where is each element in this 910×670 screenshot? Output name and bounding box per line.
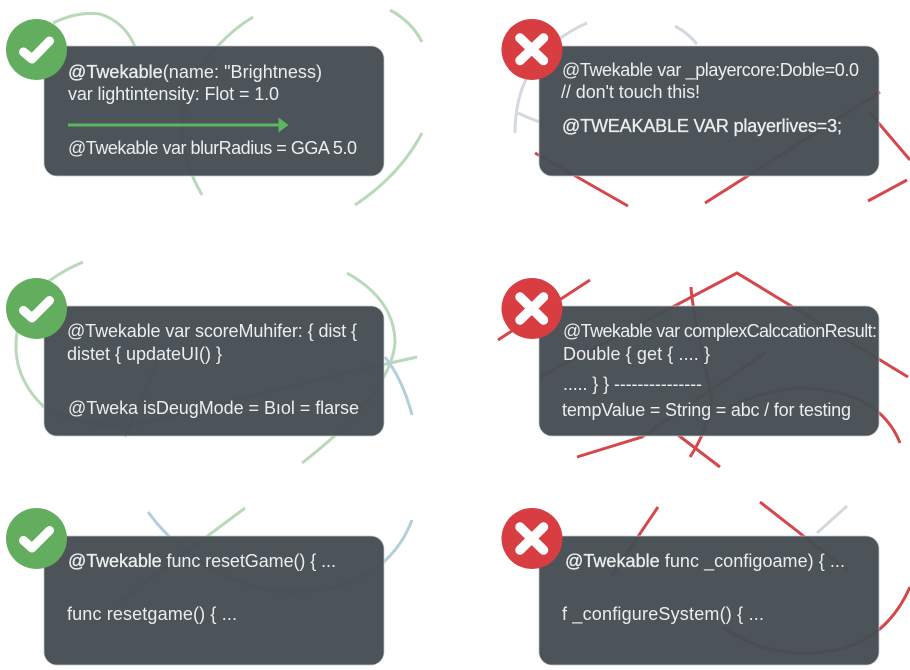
code text bbox=[561, 60, 859, 136]
code text: @Tweka isDeugMode = Bıol = flarse bbox=[68, 398, 359, 418]
panel: good example, score multiplier bbox=[6, 262, 417, 463]
panel: bad example, configure system bbox=[502, 502, 910, 665]
code text bbox=[67, 551, 336, 624]
code text: var lightintensity: Flot = 1.0 bbox=[68, 84, 279, 104]
code text bbox=[562, 321, 877, 420]
code text: @Twekable func _configoame) { ... bbox=[565, 551, 845, 572]
code card bbox=[44, 46, 384, 176]
code text: @Twekable var blurRadius = GGA 5.0 bbox=[68, 138, 357, 158]
icon: check badge bbox=[6, 19, 67, 80]
panel: good example, named tweakable bbox=[6, 10, 422, 205]
icon: cross badge bbox=[502, 19, 562, 80]
code text: // don't touch this! bbox=[561, 82, 700, 102]
panel: bad example, private score bbox=[502, 19, 910, 206]
code text: @TWEAKABLE VAR playerlives=3; bbox=[562, 116, 842, 136]
code text: f _configureSystem() { ... bbox=[562, 604, 764, 625]
code text: @Twekable var scoreMuhifer: { dist { bbox=[67, 321, 357, 341]
code card bbox=[44, 306, 384, 436]
panel: bad example, complex calculation bbox=[498, 273, 908, 467]
code card bbox=[539, 46, 879, 176]
icon: check badge bbox=[6, 278, 67, 339]
code text bbox=[68, 62, 357, 158]
code text: tempValue = String = abc / for testing bbox=[562, 400, 851, 420]
code text: Double { get { .... } bbox=[563, 344, 710, 364]
icon: cross badge bbox=[502, 508, 562, 569]
code text bbox=[562, 551, 845, 625]
code card bbox=[539, 306, 879, 436]
arrow: green bbox=[68, 120, 286, 130]
code text: ..... } } --------------- bbox=[563, 374, 702, 394]
code card bbox=[539, 536, 879, 665]
code text: @Twekable var complexCalccationResult: bbox=[563, 321, 877, 341]
code text: @Twekable(name: "Brightness) bbox=[68, 62, 322, 82]
code text: @Twekable func resetGame() { ... bbox=[68, 551, 336, 571]
code text bbox=[67, 321, 359, 418]
icon: check badge bbox=[6, 508, 67, 569]
code text: @Twekable var _playercore:Doble=0.0 bbox=[562, 60, 859, 81]
code text: distet { updateUI() } bbox=[67, 344, 222, 364]
code text: func resetgame() { ... bbox=[67, 604, 237, 624]
panel: good example, reset game bbox=[6, 508, 412, 665]
code card bbox=[44, 536, 384, 665]
icon: cross badge bbox=[502, 278, 562, 339]
